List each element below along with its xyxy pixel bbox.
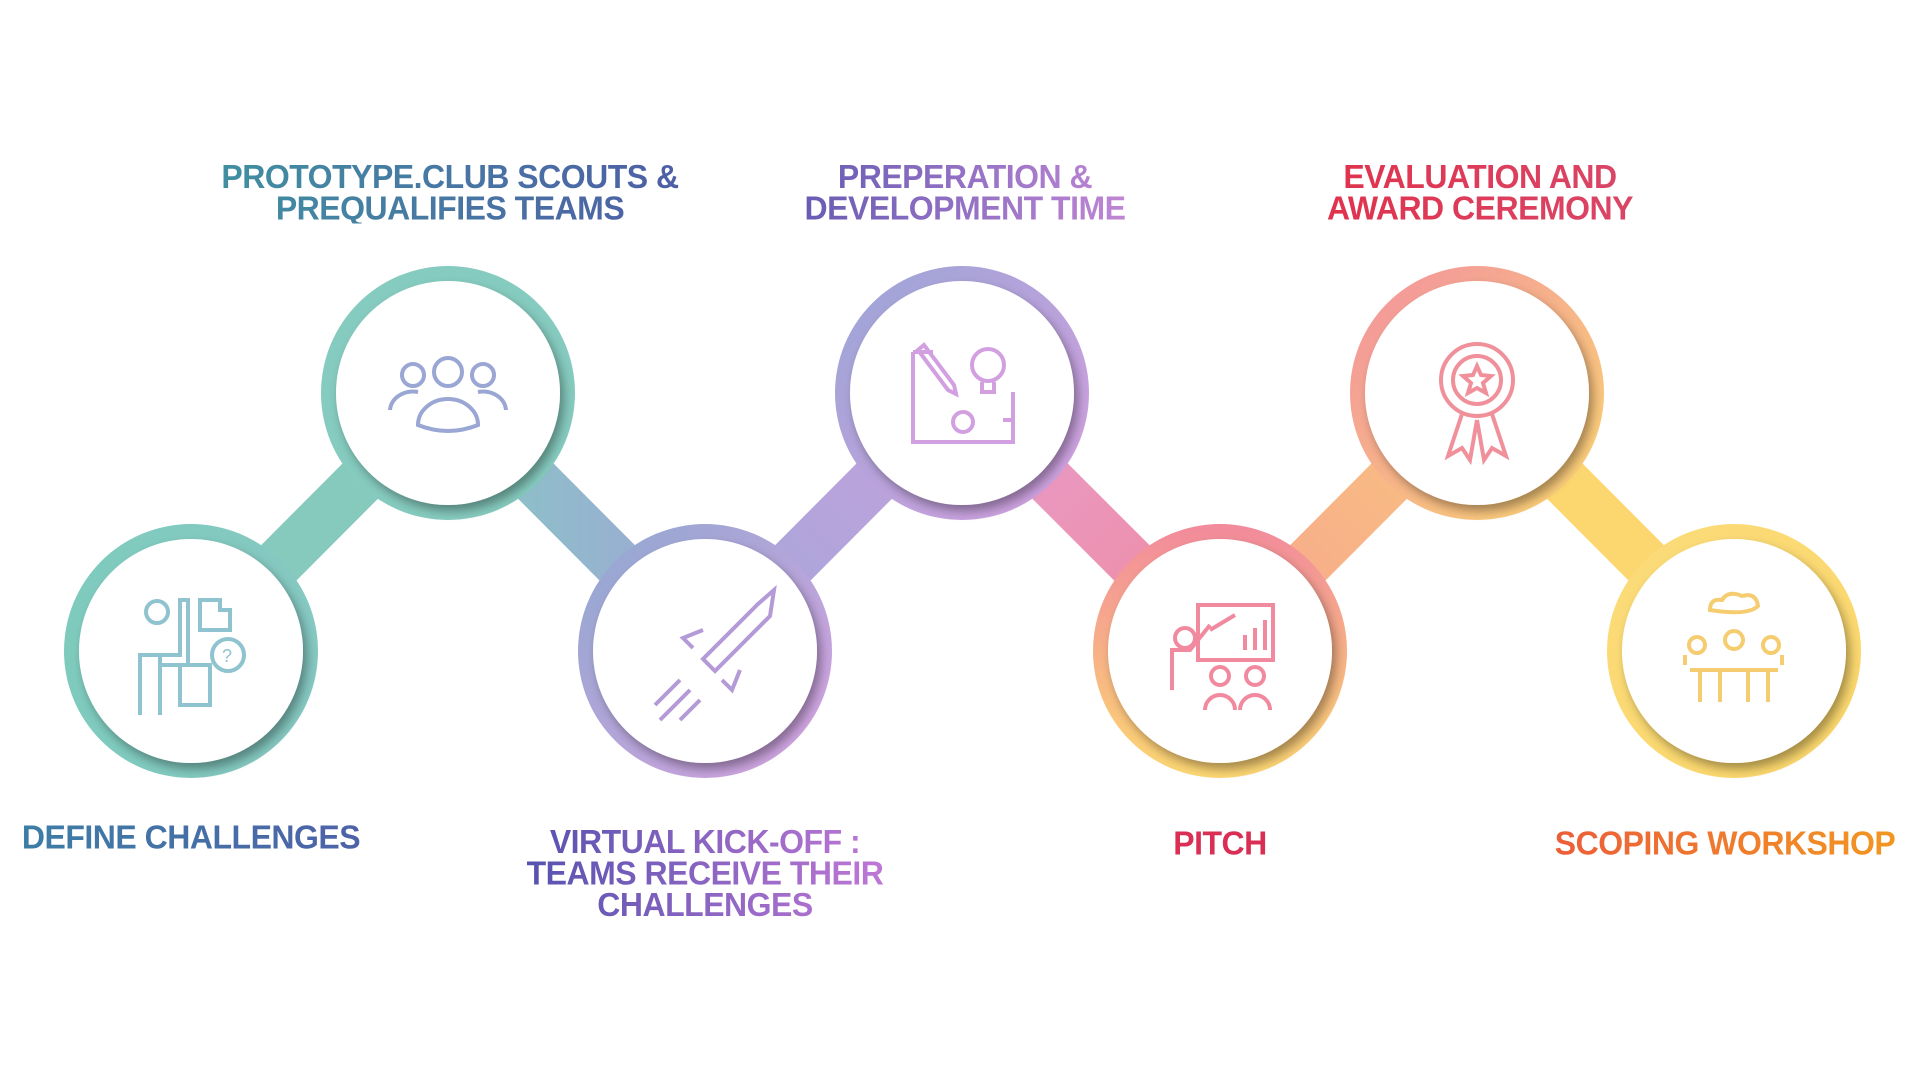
- title: prototype.club scouts: PREQUALIFIES TEAMS: [276, 189, 624, 227]
- icon: pitch: [1172, 605, 1273, 710]
- title: prototype.club scouts: PROTOTYPE.CLUB SCOUTS &: [221, 157, 679, 195]
- icon: define challenges: ?: [222, 646, 232, 666]
- icon: team: [390, 358, 506, 431]
- icon: award: [1441, 344, 1513, 460]
- title: evaluation: [1290, 160, 1670, 224]
- icon: preparation: [913, 345, 1013, 442]
- title: evaluation: AWARD CEREMONY: [1327, 189, 1633, 227]
- label: pitch: [1120, 827, 1320, 859]
- title: preparation: PREPERATION &: [838, 157, 1092, 195]
- label: pitch: PITCH: [1173, 824, 1267, 862]
- inner white circles: [79, 281, 1846, 763]
- connectors: [191, 393, 1734, 651]
- title: prototype.club scouts: [180, 160, 720, 224]
- label: virtual kick-off: VIRTUAL KICK-OFF :: [550, 823, 860, 860]
- title: evaluation: EVALUATION AND: [1343, 157, 1617, 195]
- title: preparation: DEVELOPMENT TIME: [805, 189, 1125, 227]
- label: virtual kick-off: CHALLENGES: [597, 886, 813, 923]
- label: virtual kick-off: [500, 826, 910, 920]
- label: virtual kick-off: TEAMS RECEIVE THEIR: [527, 854, 883, 892]
- icon: rocket: [655, 590, 774, 720]
- rings: [64, 266, 1861, 778]
- icon: define challenges: [140, 600, 244, 715]
- label: scoping workshop: SCOPING WORKSHOP: [1555, 824, 1895, 862]
- icon: workshop: [1685, 594, 1782, 702]
- title: preparation: [770, 160, 1160, 224]
- label: define challenges: DEFINE CHALLENGES: [22, 818, 360, 856]
